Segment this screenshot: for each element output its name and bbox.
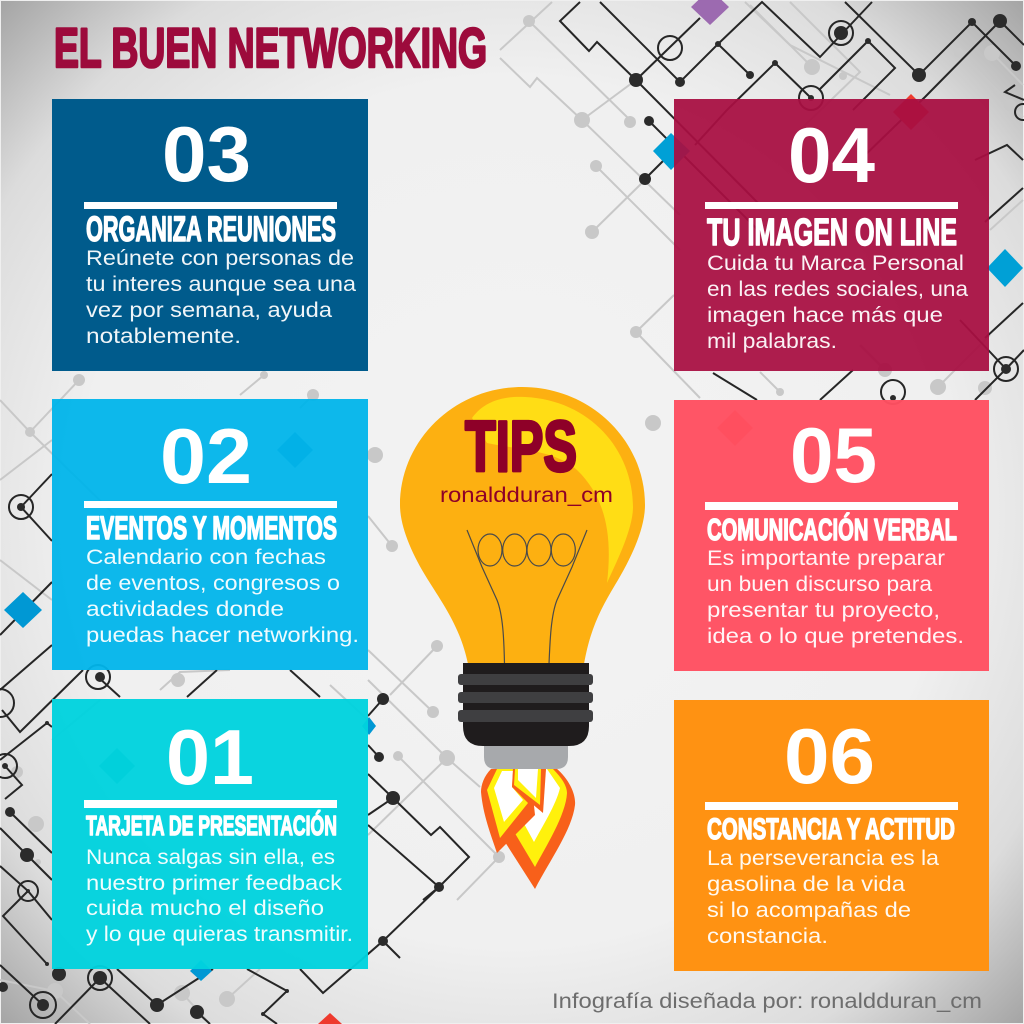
heading 02: EVENTOS Y MOMENTOS — [86, 510, 337, 546]
body 02: actividades donde — [86, 598, 284, 621]
panel: 04 tu imagen on line — [674, 99, 989, 371]
body 03: vez por semana, ayuda — [86, 299, 332, 322]
tips label: TIPS — [465, 408, 577, 487]
tips handle: ronaldduran_cm — [440, 484, 613, 507]
body 03: Reúnete con personas de — [86, 247, 354, 270]
body 01: y lo que quieras transmitir. — [86, 923, 353, 946]
icon: rocket flames — [481, 768, 575, 889]
heading 03: ORGANIZA REUNIONES — [86, 210, 336, 249]
body 04: en las redes sociales, una — [707, 278, 968, 301]
body 01: cuida mucho el diseño — [86, 897, 324, 920]
body 03: tu interes aunque sea una — [86, 273, 356, 296]
body 02: de eventos, congresos o — [86, 572, 340, 595]
number 06: 06 — [784, 712, 875, 800]
circuit pattern top right — [500, 2, 1024, 404]
body 02: puedas hacer networking. — [86, 624, 359, 647]
body 01 — [86, 846, 353, 946]
body 04 — [707, 252, 968, 353]
body 06: si lo acompañas de — [707, 899, 911, 922]
body 01: Nunca salgas sin ella, es — [86, 846, 335, 869]
body 02: Calendario con fechas — [86, 546, 326, 569]
number 04: 04 — [788, 111, 875, 199]
body 01: nuestro primer feedback — [86, 872, 343, 895]
bulb screw base — [458, 663, 593, 769]
body 05: idea o lo que pretendes. — [707, 625, 964, 648]
body 03: notablemente. — [86, 325, 241, 348]
panel: 06 constancia y actitud — [674, 700, 989, 971]
body 04: imagen hace más que — [707, 304, 943, 327]
icon: light bulb — [400, 387, 645, 769]
body 02 — [86, 546, 359, 647]
number 05: 05 — [790, 411, 877, 499]
body 05: un buen discurso para — [707, 573, 932, 596]
body 06: La perseverancia es la — [707, 847, 939, 870]
title: EL BUEN NETWORKING — [54, 16, 487, 79]
body 05: Es importante preparar — [707, 547, 945, 570]
panel: 05 comunicacion verbal — [674, 400, 989, 671]
footer credit: Infografía diseñada por: ronaldduran_cm — [552, 990, 982, 1013]
filament — [467, 530, 587, 664]
number 01: 01 — [166, 713, 254, 801]
circuit pattern left and bottom — [0, 371, 661, 1024]
body 03 — [86, 247, 356, 348]
number 03: 03 — [162, 110, 251, 198]
panel: 02 eventos y momentos — [52, 399, 368, 670]
panel: 03 organiza reuniones — [52, 99, 368, 371]
body 04: Cuida tu Marca Personal — [707, 252, 964, 275]
heading 01: TARJETA DE PRESENTACIÓN — [86, 810, 337, 841]
body 06 — [707, 847, 939, 948]
body 04: mil palabras. — [707, 330, 837, 353]
panel: 01 tarjeta de presentacion — [52, 699, 368, 969]
body 05: presentar tu proyecto, — [707, 599, 940, 622]
number 02: 02 — [160, 412, 252, 500]
body 06: gasolina de la vida — [707, 873, 905, 896]
body 06: constancia. — [707, 925, 828, 948]
body 05 — [707, 547, 964, 648]
